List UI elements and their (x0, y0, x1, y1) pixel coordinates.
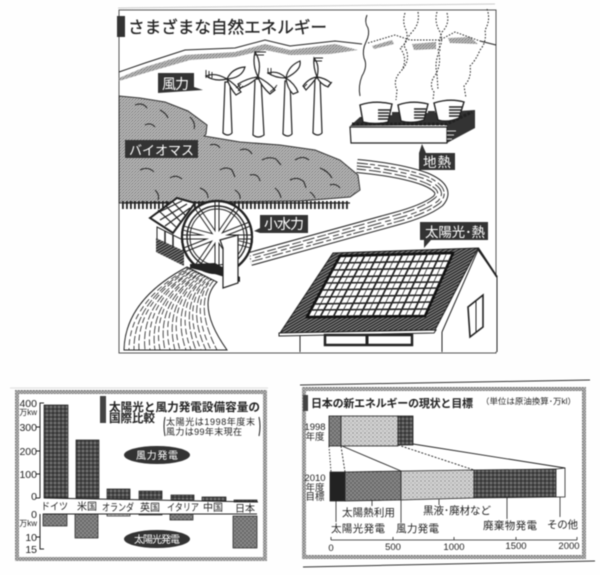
year labels (304, 422, 326, 503)
panel: natural energy illustration (117, 4, 497, 353)
label: biomass: バイオマス (129, 143, 194, 158)
panel: international comparison chart: 300 (19, 422, 37, 434)
chart title: 日本の新エネルギーの現状と目標 (311, 396, 473, 410)
lower river (124, 267, 227, 350)
x axis: 1000 (443, 542, 465, 553)
country labels: 中国 (203, 501, 223, 514)
solar panel (307, 253, 453, 317)
country labels: 日本 (235, 502, 255, 515)
country labels: オランダ (102, 501, 134, 514)
legend: solar (124, 530, 190, 548)
chart title: 国際比較 (109, 411, 155, 425)
house with solar panels (279, 248, 497, 352)
note (164, 416, 260, 437)
segment labels: その他 (547, 518, 578, 531)
legend: solar: 太陽光発電 (134, 533, 180, 546)
panel: Japan new energy chart (300, 380, 595, 567)
mountains in background (119, 32, 496, 81)
label: solar (420, 222, 488, 248)
segment labels: 黒液･廃材など (423, 504, 492, 517)
segment labels: 太陽熱利用 (342, 506, 395, 519)
wind turbines (206, 52, 332, 137)
year labels: 1998 (304, 422, 326, 433)
geothermal plant (350, 9, 489, 143)
y axis (36, 403, 44, 549)
water chute (220, 235, 238, 288)
panel: international comparison chart (10, 388, 268, 559)
label: small hydro: 小水力 (264, 216, 304, 232)
side window (468, 295, 483, 337)
steam (359, 9, 489, 100)
segment labels: 風力発電 (396, 522, 440, 535)
veranda window (325, 335, 412, 345)
x axis (328, 537, 580, 554)
year labels: 年度 (305, 431, 325, 443)
2010 bar (330, 468, 565, 501)
unit note: （単位は原油換算･万kl） (481, 396, 576, 406)
fence (122, 203, 350, 205)
panel: international comparison chart: 200 (19, 446, 37, 458)
country labels: 英国 (140, 501, 160, 514)
1998 bar (329, 416, 413, 446)
country labels: イタリア (167, 502, 199, 514)
watermill (150, 198, 252, 288)
label: wind power (158, 73, 203, 93)
segment labels (331, 504, 578, 535)
forest / biomass (119, 96, 360, 205)
panel: international comparison chart: 400 (19, 398, 37, 410)
year labels: 2010 (304, 473, 326, 484)
panel: international comparison chart: 0 (31, 509, 37, 521)
year labels: 目標 (305, 491, 325, 503)
panel: international comparison chart: 万kw (19, 519, 37, 528)
label: wind power: 風力 (162, 76, 189, 92)
title: さまざまな自然エネルギー (128, 17, 327, 37)
x axis: 2000 (558, 541, 580, 552)
panel: international comparison chart: 15 (25, 544, 37, 556)
label: solar: 太陽光･熱 (425, 225, 486, 240)
panel: international comparison chart: 100 (19, 469, 37, 481)
leader lines (336, 497, 560, 523)
legend: wind (124, 446, 190, 464)
upper river (250, 163, 444, 262)
chart title: 太陽光と風力発電設備容量の (109, 400, 260, 414)
x axis: 1500 (505, 541, 527, 552)
segment labels: 廃棄物発電 (483, 519, 538, 532)
panel: international comparison chart: 0 (31, 491, 37, 503)
note: 太陽光は1998年度末 (166, 416, 255, 427)
country labels (41, 500, 255, 515)
x axis: 500 (385, 542, 401, 553)
solar bars (43, 514, 257, 548)
connector lines (329, 444, 565, 472)
panel: international comparison chart: 10 (25, 532, 37, 544)
year labels: 年度 (305, 482, 325, 494)
segment labels: 太陽光発電 (331, 522, 386, 535)
label: geothermal (419, 144, 455, 170)
wind bars (44, 405, 257, 502)
country labels: ドイツ (41, 502, 68, 513)
panel: international comparison chart: 万kw (19, 408, 37, 417)
x axis: 0 (328, 543, 334, 554)
note: 風力は99年末現在 (166, 426, 242, 437)
legend: wind: 風力発電 (136, 449, 178, 462)
label: geothermal: 地熱 (423, 155, 452, 170)
label: small hydro (254, 215, 308, 233)
country labels: 米国 (77, 500, 97, 513)
chart title (100, 396, 260, 425)
